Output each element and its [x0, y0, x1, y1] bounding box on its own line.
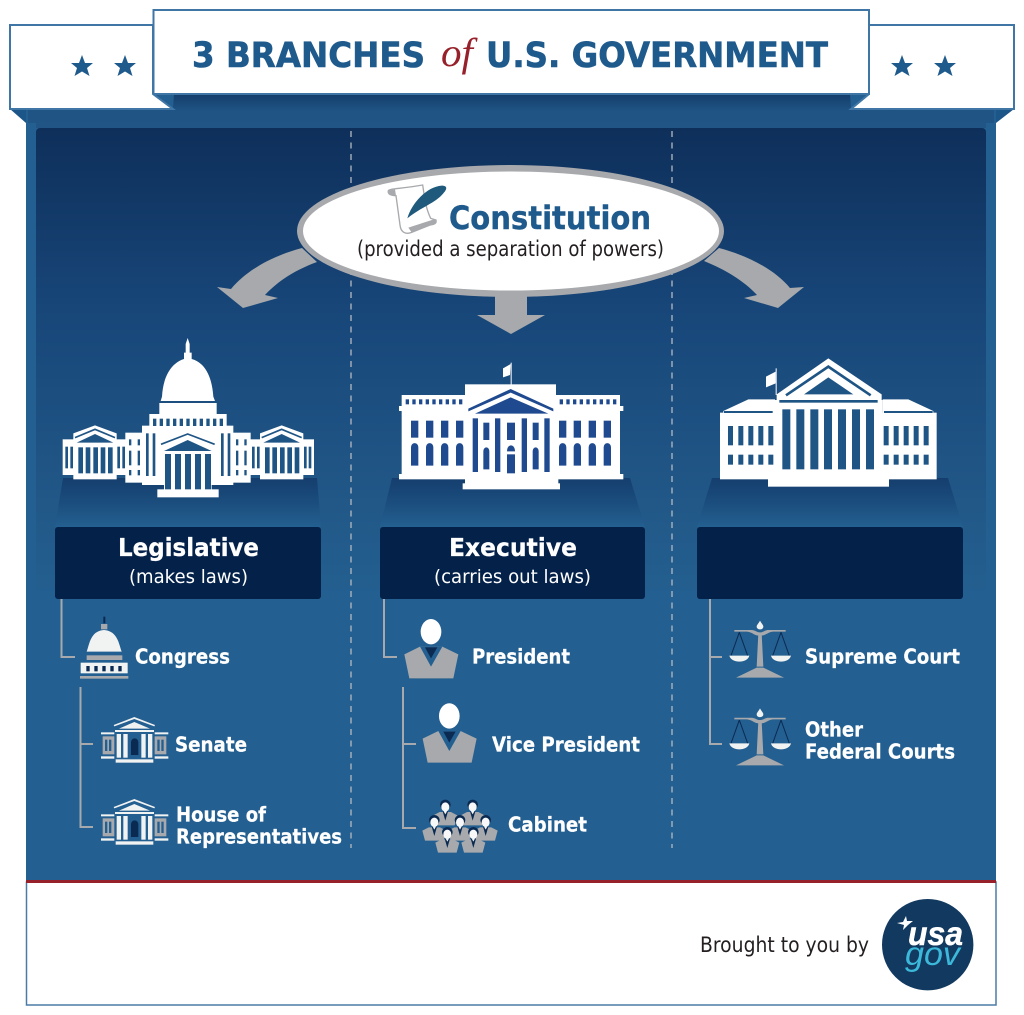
column dividers [351, 131, 672, 848]
label: Supreme Court: Supreme Court [805, 644, 960, 668]
icon: scroll and quill [388, 185, 446, 233]
logo: usa gov: gov [905, 935, 963, 972]
label: Cabinet: Cabinet [508, 812, 587, 836]
label: Senate: Senate [175, 732, 247, 756]
arrow: to judicial [704, 248, 804, 308]
label: House of Representatives: Representatives [176, 824, 342, 848]
icon: Supreme Court building [720, 358, 937, 487]
icon: scales Other Federal Courts [729, 708, 791, 765]
subtitle: makes laws: (makes laws) [129, 566, 248, 588]
panel: legislative label [55, 527, 321, 599]
label: Vice President: Vice President [492, 732, 640, 756]
icon: stars right [891, 55, 956, 76]
connector lines [62, 599, 722, 828]
legislative list [80, 617, 342, 848]
inner gradient panel [36, 128, 986, 882]
icon: Vice President [423, 703, 477, 763]
icon: Congress dome [80, 617, 128, 679]
label: Other Federal Courts: Other [805, 718, 864, 742]
title [192, 30, 828, 76]
title: U.S. GOVERNMENT [486, 36, 828, 76]
icon: House building [101, 799, 168, 845]
main blue frame [26, 94, 996, 882]
icon: Cabinet group [422, 800, 498, 853]
header ribbon: left [0, 25, 174, 124]
header ribbon: right [850, 25, 1024, 124]
label: Other Federal Courts: Federal Courts [805, 740, 955, 764]
constitution ellipse [297, 165, 724, 297]
judicial list [729, 621, 960, 765]
icon: White House [399, 363, 623, 489]
panel: executive label [380, 527, 645, 599]
heading: Constitution: Constitution [449, 199, 651, 237]
building shadows [55, 478, 963, 527]
label: House of Representatives [176, 802, 342, 848]
label: Other Federal Courts [805, 718, 955, 764]
executive list [404, 619, 640, 853]
title banner [154, 10, 869, 94]
panel: judicial label [697, 527, 963, 599]
label: President: President [472, 644, 570, 668]
title: 3 BRANCHES [192, 36, 425, 76]
text: Brought to you by: Brought to you by [700, 933, 869, 957]
subtitle: carries out laws: (carries out laws) [434, 566, 591, 588]
arrow: to executive [477, 285, 545, 334]
logo: usa gov [882, 899, 973, 990]
icon: Senate building [101, 717, 168, 763]
icon: stars left [71, 55, 136, 76]
label: House of Representatives: House of [176, 802, 267, 826]
footer panel [26, 880, 996, 1005]
heading: Legislative: Legislative [118, 533, 259, 562]
subtitle: (provided a separation of powers) [357, 237, 664, 261]
title: of [441, 30, 478, 75]
icon: President [404, 619, 458, 678]
heading: Executive: Executive [449, 533, 577, 562]
icon: Capitol building [63, 338, 314, 497]
label: Congress: Congress [135, 644, 230, 668]
icon: scales Supreme Court [729, 621, 791, 678]
logo: usa gov: usa [908, 915, 963, 952]
arrow: to legislative [217, 248, 317, 308]
